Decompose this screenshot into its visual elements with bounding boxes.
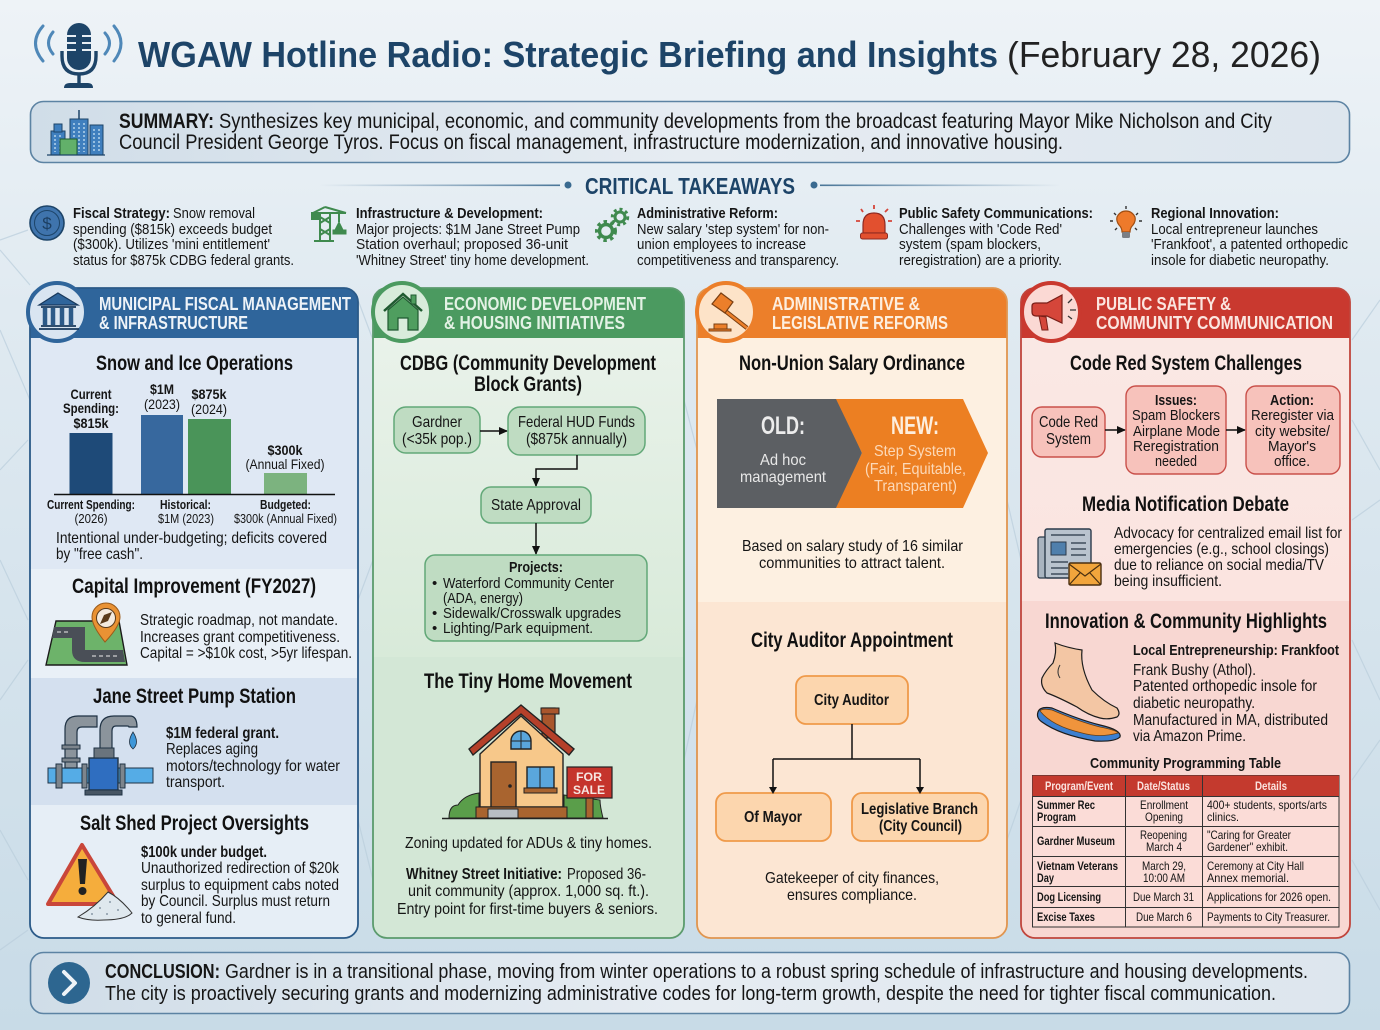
icon: alarm siren bbox=[856, 205, 892, 239]
takeaway text: 'Whitney Street' tiny home development. bbox=[356, 252, 589, 269]
panel header: MUNICIPAL FISCAL MANAGEMENT bbox=[99, 294, 351, 314]
local entrepreneurship text: Local Entrepreneurship: Frankfoot bbox=[1133, 642, 1339, 659]
summary text: SUMMARY: bbox=[119, 110, 214, 133]
box: projects: Projects: bbox=[509, 559, 563, 576]
heading: critical takeaways: CRITICAL TAKEAWAYS bbox=[585, 173, 795, 199]
icon: newspaper and envelope bbox=[1038, 529, 1101, 585]
box: projects: • bbox=[432, 575, 437, 592]
panel header: ADMINISTRATIVE & bbox=[772, 294, 920, 314]
table: community programming: Program bbox=[1037, 810, 1076, 824]
box: legislative branch: (City Council) bbox=[879, 818, 962, 835]
takeaway text bbox=[73, 205, 294, 269]
capital improvement text bbox=[140, 612, 352, 662]
salt shed text: by Council. Surplus must return bbox=[141, 893, 330, 910]
takeaway text: New salary 'step system' for non- bbox=[637, 221, 829, 238]
bar chart: snow and ice spending: $300k bbox=[268, 442, 303, 458]
table: community programming: March 29, bbox=[1142, 859, 1186, 873]
local entrepreneurship text: via Amazon Prime. bbox=[1133, 728, 1246, 745]
takeaway text: Station overhaul; proposed 36-unit bbox=[356, 236, 569, 253]
icon: house with for sale sign: SALE bbox=[573, 783, 605, 797]
box: issues: Reregistration bbox=[1133, 438, 1219, 455]
box: gardner: Gardner bbox=[412, 414, 463, 431]
table: community programming: Details bbox=[1255, 779, 1287, 793]
salary study text bbox=[742, 538, 964, 572]
arrows bbox=[773, 724, 920, 791]
panel header bbox=[99, 294, 351, 333]
takeaway: fiscal strategy bbox=[30, 205, 294, 269]
box: issues bbox=[1126, 386, 1226, 474]
conclusion box bbox=[30, 952, 1350, 1014]
icon: city skyline bbox=[47, 110, 105, 155]
panel: public safety and community communication bbox=[1021, 283, 1350, 938]
media notification text: due to reliance on social media/TV bbox=[1114, 557, 1324, 574]
table: community programming: Date/Status bbox=[1137, 779, 1190, 793]
table: community programming: Dog Licensing bbox=[1037, 890, 1101, 904]
table: community programming: 400+ students, sports/arts bbox=[1207, 798, 1327, 812]
heading: cdbg: CDBG (Community Development bbox=[400, 352, 656, 375]
tiny home text: unit community (approx. 1,000 sq. ft.). bbox=[408, 883, 649, 900]
old to new chevron diagram: management bbox=[740, 469, 827, 486]
table: community programming: Vietnam Veterans bbox=[1037, 859, 1118, 873]
panel header: LEGISLATIVE REFORMS bbox=[772, 313, 948, 333]
box: action bbox=[1246, 386, 1340, 474]
table: community programming: Reopening bbox=[1140, 828, 1187, 842]
table: community programming: Excise Taxes bbox=[1037, 910, 1095, 924]
chart note: Intentional under-budgeting; deficits covered bbox=[56, 530, 327, 547]
bar chart: snow and ice spending: $875k bbox=[192, 386, 227, 402]
old to new chevron diagram: Ad hoc bbox=[760, 452, 806, 469]
old to new chevron diagram: (Fair, Equitable, bbox=[865, 461, 966, 478]
takeaway text: system (spam blockers, bbox=[899, 236, 1041, 253]
title: (February 28, 2026) bbox=[1007, 34, 1321, 75]
panel header: & INFRASTRUCTURE bbox=[99, 313, 248, 333]
tiny home text: Whitney Street Initiative: bbox=[406, 866, 562, 883]
box: federal hud funds: ($875k annually) bbox=[526, 431, 627, 448]
salary study text: communities to attract talent. bbox=[759, 555, 945, 572]
box: projects: Sidewalk/Crosswalk upgrades bbox=[443, 605, 621, 622]
icon: warning triangle with salt pile bbox=[48, 845, 132, 920]
media notification text: Advocacy for centralized email list for bbox=[1114, 525, 1343, 542]
box: action: Action: bbox=[1270, 392, 1314, 409]
takeaway text: Public Safety Communications: bbox=[899, 205, 1093, 222]
box: of mayor: Of Mayor bbox=[744, 809, 802, 826]
chart note: by "free cash". bbox=[56, 546, 143, 563]
takeaway text: reregistration) are a priority. bbox=[899, 252, 1062, 269]
city auditor text: Gatekeeper of city finances, bbox=[765, 870, 939, 887]
bar chart: snow and ice spending: Current bbox=[70, 386, 112, 402]
box: federal hud funds bbox=[508, 407, 645, 455]
local entrepreneurship text: Manufactured in MA, distributed bbox=[1133, 712, 1328, 729]
media notification text: being insufficient. bbox=[1114, 573, 1222, 590]
old to new chevron diagram: Transparent) bbox=[874, 478, 957, 495]
old to new chevron diagram bbox=[717, 399, 988, 508]
panel header bbox=[444, 294, 646, 333]
icon: gavel bbox=[697, 283, 755, 341]
icon: megaphone bbox=[1022, 283, 1080, 341]
salt shed text: $100k under budget. bbox=[141, 844, 267, 861]
takeaway text bbox=[899, 205, 1093, 269]
local entrepreneurship text: diabetic neuropathy. bbox=[1133, 695, 1255, 712]
tiny home text bbox=[397, 835, 658, 918]
heading: cdbg: Block Grants) bbox=[474, 373, 582, 396]
icon: city hall building bbox=[28, 283, 86, 341]
icon: green house bbox=[373, 283, 431, 341]
salary study text: Based on salary study of 16 similar bbox=[742, 538, 964, 555]
takeaway text: Regional Innovation: bbox=[1151, 205, 1279, 222]
tiny home text: Entry point for first-time buyers & seniors. bbox=[397, 901, 658, 918]
bar chart: snow and ice spending: Current Spending: bbox=[47, 498, 135, 512]
box: code red system bbox=[1032, 407, 1105, 457]
table: community programming: Enrollment bbox=[1140, 798, 1189, 812]
box: legislative branch: Legislative Branch bbox=[861, 801, 978, 818]
heading: cdbg bbox=[400, 352, 656, 396]
heading: tiny home movement: The Tiny Home Movement bbox=[424, 670, 632, 693]
takeaway text: Fiscal Strategy: bbox=[73, 205, 170, 222]
panel: administrative and legislative reforms bbox=[697, 283, 1007, 938]
takeaway: regional innovation bbox=[1110, 205, 1348, 269]
heading: capital improvement: Capital Improvement (FY2027) bbox=[72, 575, 316, 598]
bar chart: snow and ice spending: Budgeted: bbox=[260, 498, 311, 512]
panel header: PUBLIC SAFETY & bbox=[1096, 294, 1231, 314]
pump station text: $1M federal grant. bbox=[166, 725, 279, 742]
table: community programming: 10:00 AM bbox=[1143, 871, 1185, 885]
panel header: COMMUNITY COMMUNICATION bbox=[1096, 313, 1333, 333]
panel header: & HOUSING INITIATIVES bbox=[444, 313, 625, 333]
heading: critical takeaways bbox=[320, 173, 1060, 199]
arrow bbox=[1226, 429, 1245, 431]
chart note bbox=[56, 530, 327, 563]
icon: microphone with broadcast waves bbox=[36, 23, 121, 88]
box: of mayor bbox=[716, 787, 831, 841]
icon: dollar coin: $ bbox=[42, 214, 52, 233]
table: community programming: clinics. bbox=[1207, 810, 1239, 824]
bar chart: snow and ice spending: $1M (2023) bbox=[158, 512, 214, 526]
pump station text: transport. bbox=[166, 774, 225, 791]
heading: jane street pump station: Jane Street Pump Station bbox=[93, 685, 296, 708]
panel header: ECONOMIC DEVELOPMENT bbox=[444, 294, 646, 314]
title: WGAW Hotline Radio: Strategic Briefing and Insights bbox=[138, 34, 998, 75]
box: issues: needed bbox=[1155, 453, 1197, 470]
heading: snow and ice operations: Snow and Ice Operations bbox=[96, 352, 293, 375]
arrow bbox=[1105, 429, 1125, 431]
table: community programming: Applications for 2026 open. bbox=[1207, 890, 1331, 904]
icon: water pump pipes bbox=[48, 716, 153, 795]
takeaway text: spending ($815k) exceeds budget bbox=[73, 221, 273, 238]
city auditor text bbox=[765, 870, 939, 904]
tiny home text: Zoning updated for ADUs & tiny homes. bbox=[405, 835, 652, 852]
conclusion text bbox=[105, 961, 1308, 1005]
summary text: Council President George Tyros. Focus on fiscal management, infrastructure modernization, and innovative housing. bbox=[119, 131, 1063, 154]
panel: economic development and housing initiatives bbox=[373, 283, 684, 938]
flowchart: code red challenges bbox=[1032, 386, 1340, 474]
table: community programming: Payments to City Treasurer. bbox=[1207, 910, 1330, 924]
box: gardner: (<35k pop.) bbox=[402, 431, 472, 448]
icon: chevron circle bbox=[48, 962, 90, 1004]
bar chart: snow and ice spending: (2026) bbox=[74, 512, 108, 526]
org chart: city auditor bbox=[716, 676, 988, 841]
box: city auditor bbox=[796, 676, 908, 724]
takeaway text: Administrative Reform: bbox=[637, 205, 778, 222]
icon: house with for sale sign bbox=[442, 705, 612, 818]
box: action: Reregister via bbox=[1251, 407, 1335, 424]
takeaway text: Local entrepreneur launches bbox=[1151, 221, 1318, 238]
box: code red system: Code Red bbox=[1039, 414, 1098, 431]
box: city auditor: City Auditor bbox=[814, 692, 889, 709]
takeaway: infrastructure and development bbox=[312, 205, 589, 269]
local entrepreneurship text bbox=[1133, 642, 1339, 745]
box: action: city website/ bbox=[1255, 423, 1331, 440]
table: community programming bbox=[1032, 775, 1339, 927]
salt shed text bbox=[141, 844, 340, 927]
old to new chevron diagram: OLD: bbox=[761, 412, 805, 440]
table: community programming: Summer Rec bbox=[1037, 798, 1095, 812]
takeaway text bbox=[637, 205, 839, 269]
table: community programming: Gardener" exhibit. bbox=[1207, 840, 1288, 854]
heading: code red system challenges: Code Red System Challenges bbox=[1070, 352, 1302, 375]
table: community programming: Ceremony at City Hall bbox=[1207, 859, 1304, 873]
conclusion text: CONCLUSION: bbox=[105, 961, 220, 983]
icon: light bulb bbox=[1110, 206, 1142, 238]
takeaway text: competitiveness and transparency. bbox=[637, 252, 839, 269]
capital improvement text: Increases grant competitiveness. bbox=[140, 629, 340, 646]
takeaway text: Infrastructure & Development: bbox=[356, 205, 543, 222]
arrow bbox=[535, 523, 537, 554]
capital improvement text: Strategic roadmap, not mandate. bbox=[140, 612, 338, 629]
pump station text: Replaces aging bbox=[166, 741, 258, 758]
icon: crane bbox=[312, 207, 346, 241]
icon: dollar coin bbox=[30, 206, 64, 240]
takeaway text bbox=[356, 205, 589, 269]
box: state approval: State Approval bbox=[491, 497, 581, 514]
table: community programming: Opening bbox=[1145, 810, 1183, 824]
panel header bbox=[772, 294, 948, 333]
bar chart: snow and ice spending: (Annual Fixed) bbox=[246, 456, 324, 472]
summary box bbox=[30, 102, 1350, 162]
bar chart: snow and ice spending bbox=[47, 381, 337, 526]
box: action: Mayor's bbox=[1268, 438, 1316, 455]
box: issues: Airplane Mode bbox=[1133, 423, 1220, 440]
city auditor text: ensures compliance. bbox=[787, 887, 917, 904]
takeaway text: Major projects: $1M Jane Street Pump bbox=[356, 221, 580, 238]
salt shed text: to general fund. bbox=[141, 910, 236, 927]
table: community programming: Due March 31 bbox=[1133, 890, 1194, 904]
box: projects: Lighting/Park equipment. bbox=[443, 620, 593, 637]
box: state approval bbox=[481, 487, 591, 523]
takeaway text: ($300k). Utilizes 'mini entitlement' bbox=[73, 236, 270, 253]
box: code red system: System bbox=[1046, 431, 1091, 448]
flowchart: cdbg funding process bbox=[394, 407, 647, 641]
local entrepreneurship text: Frank Bushy (Athol). bbox=[1133, 662, 1256, 679]
icon: gears bbox=[596, 209, 628, 240]
capital improvement text: Capital = >$10k cost, >5yr lifespan. bbox=[140, 645, 352, 662]
salt shed text: Unauthorized redirection of $20k bbox=[141, 860, 340, 877]
pump station text bbox=[166, 725, 341, 791]
table: community programming: Due March 6 bbox=[1136, 910, 1192, 924]
panel: municipal fiscal management and infrastructure bbox=[28, 283, 358, 938]
conclusion text: The city is proactively securing grants and modernizing administrative codes for long-term growth, despite the need for tighter fiscal communication. bbox=[105, 983, 1276, 1005]
takeaway text: status for $875k CDBG federal grants. bbox=[73, 252, 294, 269]
tiny home text: Proposed 36- bbox=[567, 866, 646, 883]
box: issues: Spam Blockers bbox=[1132, 407, 1220, 424]
table: community programming: Gardner Museum bbox=[1037, 834, 1115, 848]
icon: foot and orthopedic insole bbox=[1038, 643, 1120, 741]
box: federal hud funds: Federal HUD Funds bbox=[518, 414, 635, 431]
takeaway text: 'Frankfoot', a patented orthopedic bbox=[1151, 236, 1348, 253]
takeaway text: Snow removal bbox=[173, 205, 255, 222]
box: gardner bbox=[394, 407, 480, 453]
bar chart: snow and ice spending: (2023) bbox=[144, 396, 180, 412]
takeaway text: insole for diabetic neuropathy. bbox=[1151, 252, 1329, 269]
box: projects: Waterford Community Center bbox=[443, 575, 614, 592]
box: projects: • bbox=[432, 605, 437, 622]
icon: house with for sale sign: FOR bbox=[576, 770, 602, 784]
summary text bbox=[119, 110, 1272, 154]
bar chart: snow and ice spending: $815k bbox=[74, 415, 109, 431]
box: legislative branch bbox=[852, 787, 988, 841]
bar chart: snow and ice spending: $300k (Annual Fixed) bbox=[234, 512, 337, 526]
heading: salt shed project oversights: Salt Shed Project Oversights bbox=[80, 812, 309, 835]
table: community programming: March 4 bbox=[1146, 840, 1182, 854]
icon: map with pin bbox=[46, 603, 127, 665]
old to new chevron diagram: Step System bbox=[874, 443, 956, 460]
bar chart: snow and ice spending: Spending: bbox=[63, 400, 119, 416]
local entrepreneurship text: Patented orthopedic insole for bbox=[1133, 678, 1318, 695]
takeaway: administrative reform bbox=[596, 205, 839, 269]
arrow bbox=[480, 430, 507, 432]
media notification text: emergencies (e.g., school closings) bbox=[1114, 541, 1329, 558]
media notification text bbox=[1114, 525, 1343, 590]
takeaway text bbox=[1151, 205, 1348, 269]
heading: media notification debate: Media Notification Debate bbox=[1082, 493, 1289, 516]
table: community programming: "Caring for Greater bbox=[1207, 828, 1291, 842]
table: community programming: Day bbox=[1037, 871, 1054, 885]
box: issues: Issues: bbox=[1155, 392, 1197, 409]
table: community programming: Program/Event bbox=[1045, 779, 1113, 793]
table: community programming: Annex memorial. bbox=[1207, 871, 1289, 885]
takeaway text: union employees to increase bbox=[637, 236, 806, 253]
box: projects: (ADA, energy) bbox=[443, 590, 523, 607]
bar chart: snow and ice spending: (2024) bbox=[191, 401, 227, 417]
bar chart: snow and ice spending: Historical: bbox=[160, 498, 211, 512]
arrow bbox=[536, 455, 577, 486]
takeaway text: Challenges with 'Code Red' bbox=[899, 221, 1062, 238]
box: action: office. bbox=[1274, 453, 1310, 470]
heading: city auditor appointment: City Auditor Appointment bbox=[751, 629, 953, 652]
heading: non-union salary ordinance: Non-Union Salary Ordinance bbox=[739, 352, 965, 375]
box: projects: • bbox=[432, 620, 437, 637]
bar chart: snow and ice spending: $1M bbox=[150, 381, 174, 397]
old to new chevron diagram: NEW: bbox=[891, 412, 939, 440]
panel header bbox=[1096, 294, 1333, 333]
table heading: Community Programming Table bbox=[1090, 755, 1281, 772]
salt shed text: surplus to equipment cabs noted bbox=[141, 877, 339, 894]
box: projects bbox=[425, 555, 647, 641]
takeaway: public safety communications bbox=[856, 205, 1093, 269]
pump station text: motors/technology for water bbox=[166, 758, 341, 775]
